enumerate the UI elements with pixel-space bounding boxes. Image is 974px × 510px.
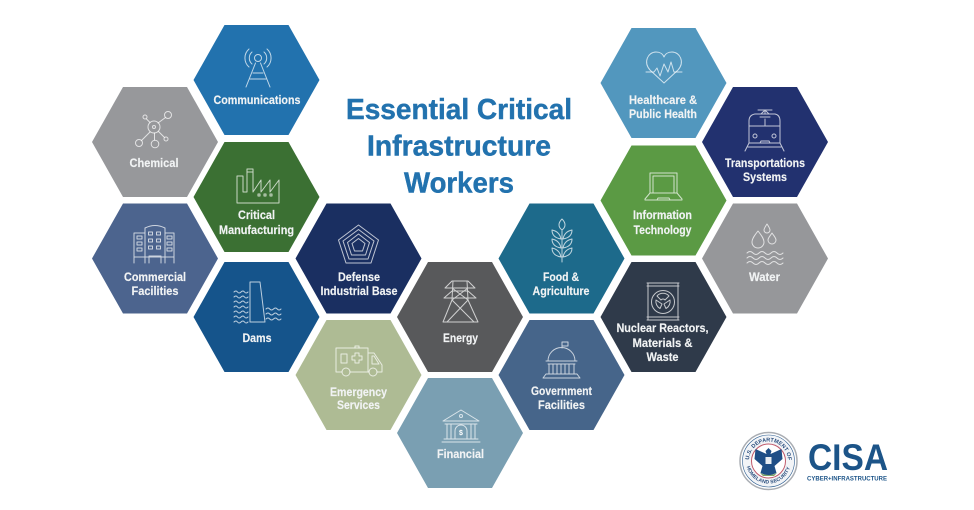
icon: heart with pulse: [646, 52, 682, 83]
icon: wheat: [552, 219, 572, 262]
label: Technology: [634, 223, 692, 237]
label: Systems: [743, 170, 787, 184]
label: Healthcare &: [629, 93, 697, 107]
label: [633, 208, 692, 237]
panel: Critical Manufacturing: [194, 142, 320, 252]
label: Emergency: [330, 385, 387, 399]
icon: factory: [237, 169, 279, 203]
label: Facilities: [132, 284, 179, 298]
logo: DHS seal: [739, 432, 798, 490]
logo: DHS seal: U.S. DEPARTMENT OF: [745, 438, 792, 460]
title: Infrastructure: [367, 130, 551, 162]
icon: transmission tower: [443, 281, 478, 322]
panel: Information Technology: [600, 146, 726, 256]
label: Chemical: [130, 156, 178, 170]
label: Waste: [646, 350, 679, 364]
label: Financial: [437, 447, 484, 461]
panel: Government Facilities: [498, 320, 624, 430]
panel: Nuclear Reactors, Materials & Waste: [600, 262, 726, 372]
panel: Chemical: [92, 87, 218, 197]
label: [531, 384, 592, 412]
label: [725, 156, 805, 184]
icon: capitol building: [543, 342, 580, 378]
icon: water drops: [747, 224, 783, 264]
icon: bank: $: [459, 430, 463, 437]
label: Critical: [238, 208, 275, 222]
title: [346, 94, 572, 200]
label: Defense: [338, 270, 380, 284]
label: Materials &: [632, 336, 693, 350]
label: Transportations: [725, 156, 805, 170]
label: [616, 321, 708, 364]
label: Information: [633, 208, 692, 222]
label: [219, 208, 294, 237]
panel: Healthcare & Public Health: [600, 28, 726, 138]
label: Facilities: [538, 398, 585, 412]
icon: laptop: [645, 173, 682, 200]
icon: dam with water: [234, 282, 281, 323]
label: Industrial Base: [320, 284, 398, 298]
label: Communications: [214, 93, 301, 107]
panel: Communications: [194, 25, 320, 135]
label: Agriculture: [532, 284, 590, 298]
label: Public Health: [629, 107, 697, 121]
label: [320, 270, 398, 298]
label: Services: [337, 398, 380, 412]
icon: train: [745, 110, 784, 151]
label: Energy: [443, 331, 478, 345]
panel: Food & Agriculture: [498, 204, 624, 314]
label: [532, 270, 590, 298]
label: [124, 270, 186, 298]
logo: CISA wordmark: CYBER+INFRASTRUCTURE: [807, 476, 888, 482]
panel: Energy: [397, 262, 523, 372]
panel: Defense Industrial Base: [296, 204, 422, 314]
label: [629, 93, 697, 121]
panel: Dams: [194, 262, 320, 372]
panel: Financial: [397, 378, 523, 488]
label: Commercial: [124, 270, 186, 284]
icon: nuclear barrel: [647, 283, 679, 320]
logo: CISA wordmark: CISA: [808, 437, 888, 478]
logo: DHS seal: HOMELAND SECURITY: [746, 466, 790, 484]
label: [330, 385, 387, 412]
icon: pentagon: [338, 225, 378, 263]
panel: Water: [702, 204, 828, 314]
label: Nuclear Reactors,: [616, 321, 708, 335]
icon: molecule: [136, 112, 172, 148]
panel: Commercial Facilities: [92, 204, 218, 314]
label: Dams: [242, 331, 272, 345]
panel: Transportations Systems: [702, 87, 828, 197]
label: Water: [749, 270, 780, 284]
label: Food &: [543, 270, 579, 284]
label: Government: [531, 384, 592, 398]
icon: office building: [134, 226, 174, 263]
label: Manufacturing: [219, 223, 294, 237]
title: Essential Critical: [346, 94, 572, 126]
icon: ambulance: [336, 346, 382, 376]
title: Workers: [404, 168, 514, 200]
icon: radio tower: [245, 49, 271, 87]
panel: Emergency Services: [296, 320, 422, 430]
